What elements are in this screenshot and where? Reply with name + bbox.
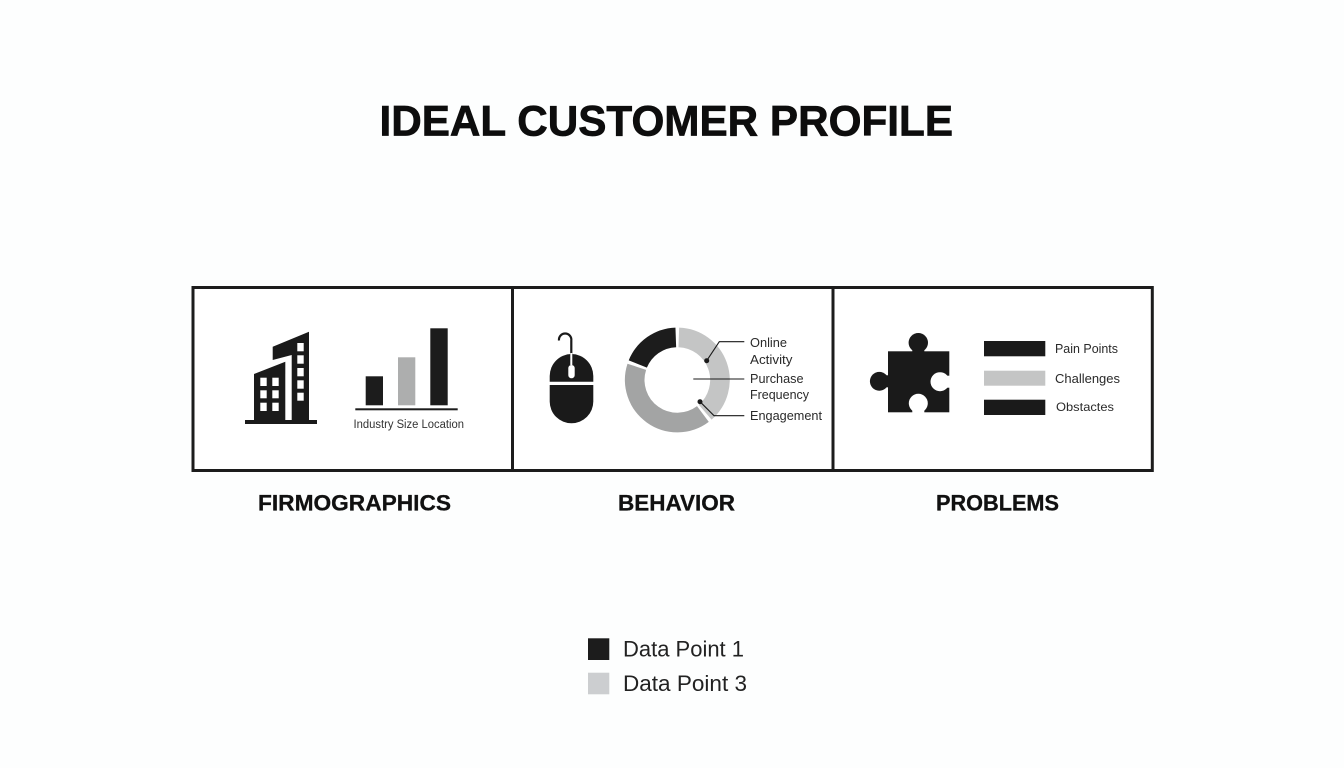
- icon: puzzle piece: [870, 333, 950, 414]
- panel: behavior: [512, 288, 833, 470]
- legend: [588, 636, 747, 696]
- legend item: data point 1: Data Point 1: [623, 636, 744, 662]
- panel: problems: [833, 288, 1152, 470]
- list: pain points: [984, 341, 1118, 356]
- icon: office buildings: [245, 332, 317, 424]
- legend item: data point 3: Data Point 3: [623, 671, 747, 696]
- callout: purchase frequency: [693, 372, 810, 402]
- list: obstacles: [984, 400, 1114, 415]
- heading: behavior: BEHAVIOR: [618, 490, 735, 516]
- heading: firmographics: FIRMOGRAPHICS: [258, 490, 451, 516]
- icon: computer mouse: [550, 334, 593, 423]
- heading: problems: PROBLEMS: [936, 490, 1059, 516]
- callout: engagement: [698, 399, 823, 423]
- callout: engagement: Engagement: [750, 409, 823, 423]
- bar chart: industry, size, location: Industry Size Location: [354, 419, 464, 431]
- callout: online activity: Online: [750, 336, 787, 350]
- callout: purchase frequency: Purchase: [750, 372, 804, 386]
- list: obstacles: Obstactes: [1056, 400, 1114, 414]
- list: pain points: Pain Points: [1055, 342, 1118, 356]
- list: challenges: [984, 371, 1120, 386]
- panel: firmographics: [193, 288, 512, 470]
- title: IDEAL CUSTOMER PROFILE: [380, 98, 953, 146]
- callout: online activity: [704, 336, 793, 367]
- callout: purchase frequency: Frequency: [750, 388, 810, 402]
- list: challenges: Challenges: [1055, 372, 1120, 386]
- bar chart: industry, size, location: [354, 328, 464, 431]
- callout: online activity: Activity: [750, 353, 793, 367]
- donut chart: [635, 337, 720, 423]
